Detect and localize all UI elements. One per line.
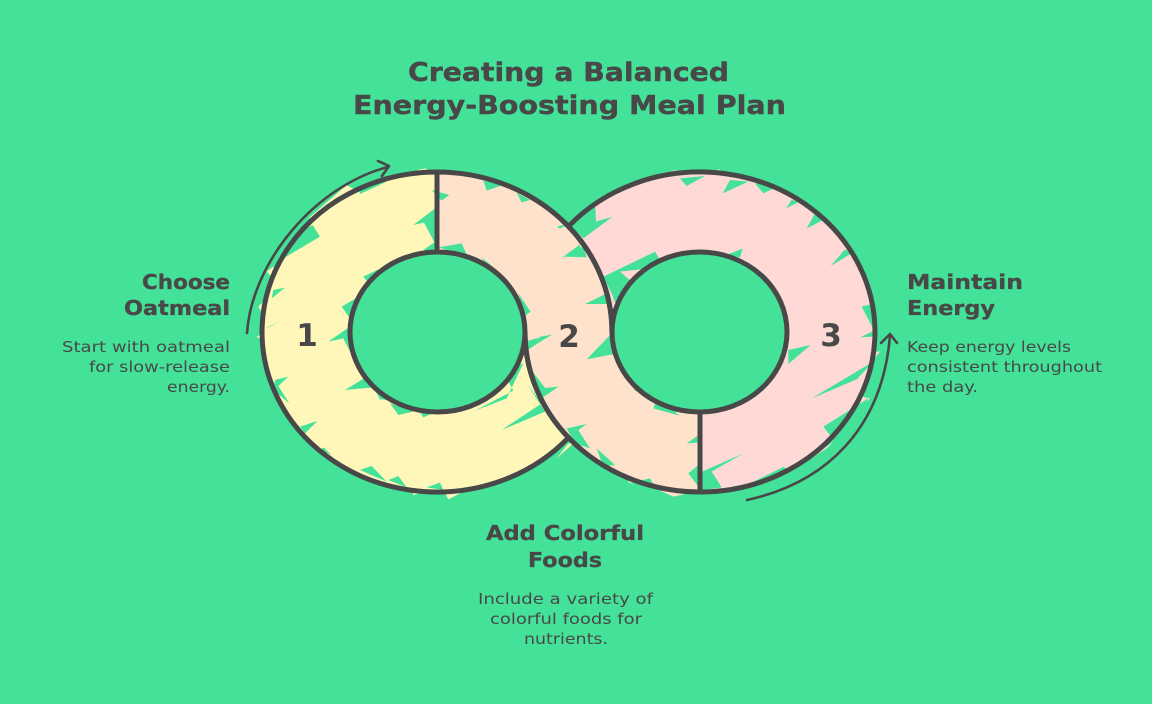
segment 2: peach <box>432 172 700 497</box>
step 2 label: Add Colorful Foods <box>478 521 654 648</box>
step 2 description <box>478 590 654 648</box>
step 2 description: colorful foods for <box>490 610 643 628</box>
step 1 label: Choose Oatmeal <box>62 270 230 396</box>
step 2 label: Add Colorful Foods: Add Colorful <box>486 521 644 545</box>
number 1: 1 <box>296 318 318 354</box>
title: Creating a Balanced <box>408 58 729 88</box>
ring outlines <box>262 172 875 492</box>
step 1 label: Choose Oatmeal: Choose <box>142 270 230 294</box>
number 3: 3 <box>820 318 842 354</box>
step 3 label: Maintain Energy <box>907 270 1102 396</box>
step 1 label: Choose Oatmeal: Oatmeal <box>124 296 230 320</box>
arrow: clockwise over first ring <box>247 161 389 333</box>
step 1 description <box>62 338 230 396</box>
segment 3: pink <box>568 169 880 492</box>
segment 1: yellow <box>257 168 573 499</box>
title: Energy-Boosting Meal Plan <box>353 91 786 121</box>
step 3 description <box>907 338 1102 396</box>
step 3 label: Maintain Energy: Maintain <box>907 270 1023 294</box>
step 1 description: Start with oatmeal <box>62 338 230 356</box>
step 1 description: energy. <box>167 378 230 396</box>
step 1 description: for slow-release <box>89 358 230 376</box>
step 3 description: consistent throughout <box>907 358 1102 376</box>
step 3 description: Keep energy levels <box>907 338 1071 356</box>
step 2 label: Add Colorful Foods: Foods <box>528 548 602 572</box>
title <box>353 58 786 121</box>
step 3 description: the day. <box>907 378 978 396</box>
step 2 description: nutrients. <box>524 630 608 648</box>
arrow: counterclockwise around third ring <box>747 334 897 500</box>
step 3 label: Maintain Energy: Energy <box>907 296 995 320</box>
step 2 description: Include a variety of <box>478 590 654 608</box>
number 2: 2 <box>558 319 580 355</box>
